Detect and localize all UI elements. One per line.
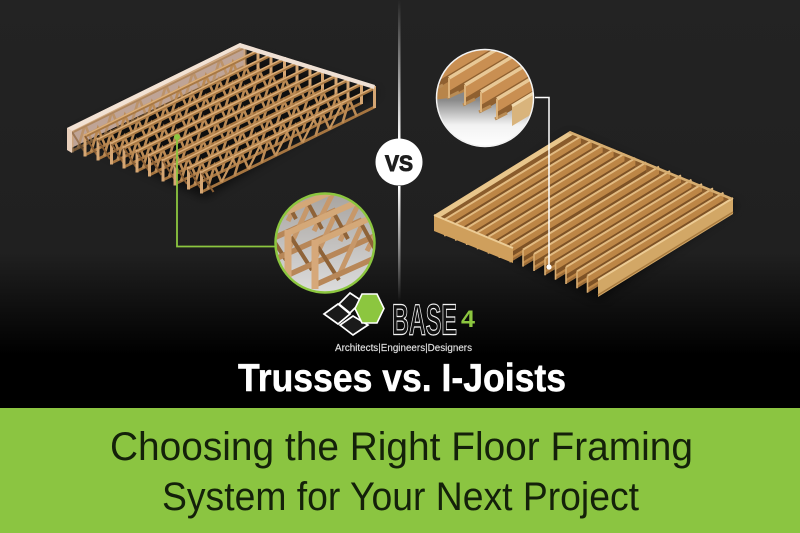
title: Trusses vs. I-Joists — [238, 357, 566, 400]
last joist with OSB web — [598, 198, 733, 297]
logo wordmark: BASE — [392, 296, 457, 344]
rims — [434, 131, 574, 218]
white leader line — [535, 98, 552, 270]
green leader line — [174, 134, 275, 246]
subtitle: Choosing the Right Floor Framing — [110, 425, 693, 469]
vertical divider line — [398, 0, 400, 301]
logo — [324, 293, 476, 354]
subtitle: System for Your Next Project — [162, 475, 639, 519]
vs badge: VS — [385, 151, 413, 176]
back rim board — [67, 43, 245, 150]
logo numeral: 4 — [461, 306, 476, 333]
I-joist floor illustration — [434, 131, 738, 300]
logo mark — [324, 293, 384, 335]
zoom circle: truss detail — [274, 192, 376, 294]
vs badge — [376, 138, 422, 186]
dark background — [0, 0, 800, 408]
green banner — [0, 408, 800, 533]
zoom circle: I-joist detail — [436, 48, 534, 148]
truss floor illustration — [67, 43, 378, 198]
subtitle — [110, 425, 693, 519]
logo tagline: Architects|Engineers|Designers — [335, 342, 472, 354]
